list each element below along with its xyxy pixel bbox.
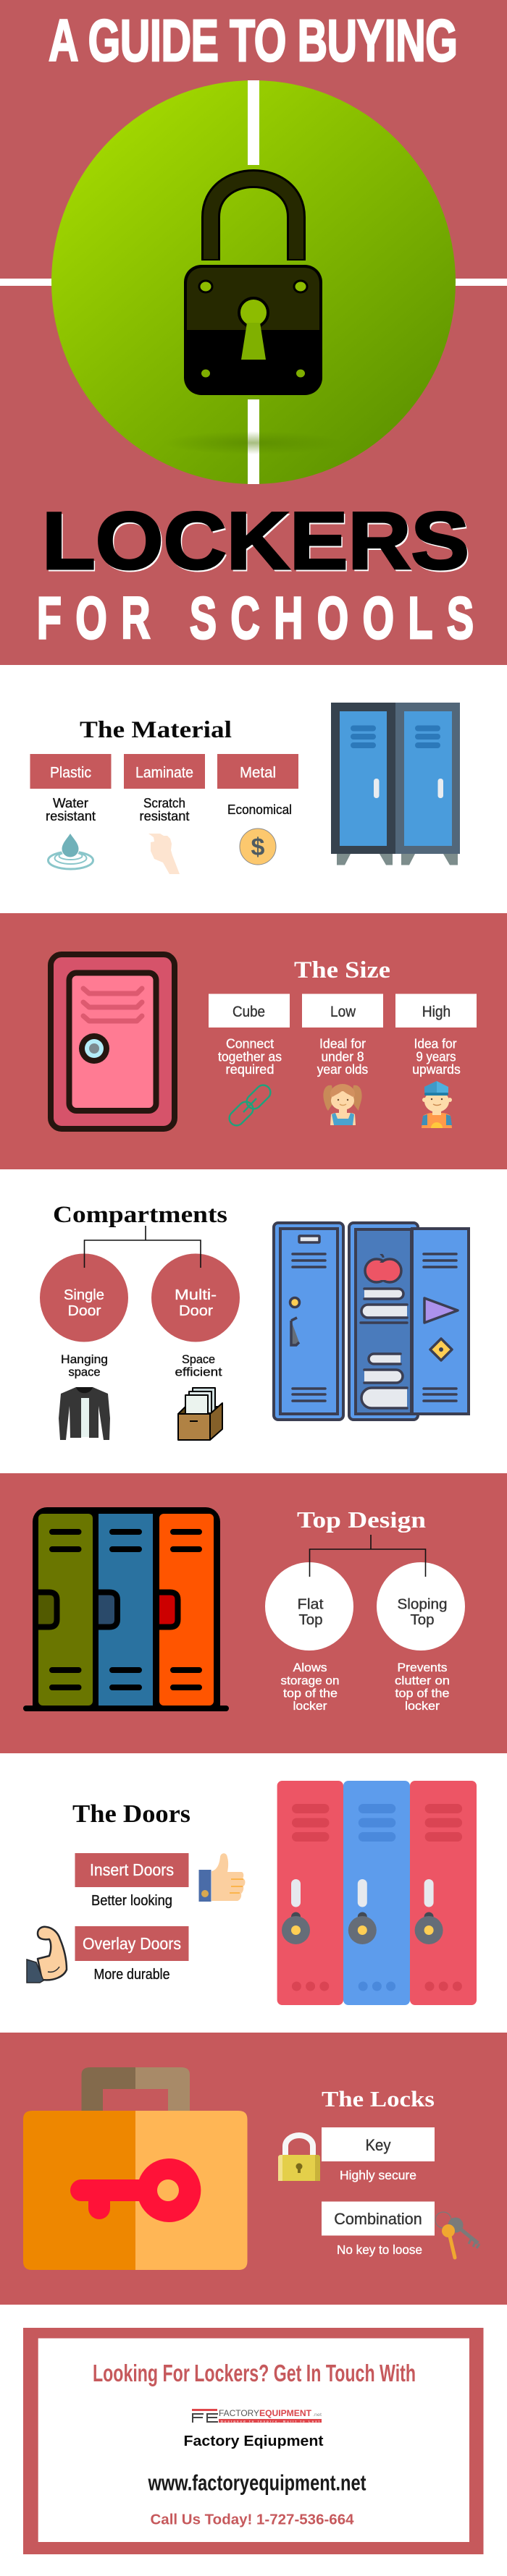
circle: single door: Door (68, 1303, 101, 1319)
text: economical: Economical (227, 802, 292, 817)
title: lockers: LOCKERS (43, 498, 471, 588)
text: connect together as required: together as (218, 1049, 282, 1064)
title: for schools: FOR SCHOOLS (37, 585, 474, 651)
text: space efficient: Space (182, 1353, 215, 1366)
circle: sloping top (377, 1562, 465, 1651)
decorative crosshair lines (0, 279, 507, 286)
text: no key to loose: No key to loose (337, 2242, 422, 2257)
box: high: High (422, 1004, 451, 1020)
icon: pennant (424, 1298, 458, 1323)
illustration: colored locker row (23, 1507, 229, 1711)
text: hanging space: space (68, 1366, 100, 1379)
text: scratch resistant: resistant (139, 808, 190, 823)
illustration: red and blue lockers (277, 1781, 477, 2005)
logo: factory equipment (192, 2408, 322, 2423)
panel: the size (0, 913, 507, 1169)
text: ideal for under 8 year olds: year olds (317, 1062, 368, 1077)
logo: factory equipment: Designed to Inspire. Built to Last (221, 2420, 320, 2423)
icon: diamond sticker (430, 1339, 452, 1360)
text: prevents clutter: Prevents (397, 1661, 448, 1674)
heading: the material: The Material (80, 717, 232, 743)
panel: hero (0, 0, 507, 665)
text: water resistant: Water (53, 795, 88, 810)
box: cube (209, 994, 290, 1028)
box: metal (217, 754, 298, 789)
text: prevents clutter: top of the (395, 1687, 449, 1700)
lock shadow (163, 431, 344, 454)
circle: multi-door (151, 1253, 240, 1342)
circle: single door (40, 1253, 128, 1342)
circle: single door: Single (64, 1287, 104, 1303)
text: allows storage: top of the (283, 1687, 338, 1700)
icon: gold padlock (278, 2135, 320, 2181)
logo: factory equipment: .net (313, 2413, 322, 2418)
circle: multi-door: Multi- (175, 1287, 217, 1303)
circle: sloping top: Top (410, 1612, 435, 1628)
box: insert doors (75, 1853, 188, 1887)
crosshair vertical bars (248, 80, 259, 484)
icon: file box (178, 1388, 222, 1440)
text: prevents clutter: locker (405, 1700, 440, 1713)
logo: factory equipment: EQUIPMENT (259, 2408, 312, 2418)
icon: dollar coin: $ (251, 834, 265, 861)
box: plastic (30, 754, 112, 789)
box: key: Key (365, 2136, 391, 2154)
text: ideal for under 8 year olds (317, 1036, 368, 1077)
text: idea for 9 years upwards: 9 years (416, 1049, 456, 1064)
text: connect together as required (218, 1036, 282, 1077)
text: idea for 9 years upwards: Idea for (414, 1036, 456, 1051)
circle: flat top (265, 1562, 353, 1651)
illustration: blue lockers with books (274, 1223, 469, 1420)
box: plastic: Plastic (50, 764, 91, 781)
box: overlay doors (75, 1926, 188, 1961)
text: space efficient (175, 1353, 222, 1379)
text: prevents clutter: clutter on (395, 1674, 450, 1687)
panel: the locks (0, 2033, 507, 2305)
icon: key ring (435, 2212, 479, 2258)
illustration: double locker (331, 703, 460, 865)
text: water resistant: resistant (46, 808, 96, 823)
connector: compartments tree (84, 1226, 201, 1268)
box: laminate (124, 754, 205, 789)
text: more durable: More durable (94, 1967, 169, 1983)
text: connect together as required: required (226, 1062, 274, 1077)
text: phone: Call Us Today! 1-727-536-664 (151, 2512, 354, 2528)
text: idea for 9 years upwards: upwards (412, 1062, 461, 1077)
circle: flat top: Top (298, 1612, 323, 1628)
text: ideal for under 8 year olds: under 8 (322, 1049, 364, 1064)
box: low (302, 994, 383, 1028)
text: website: www.factoryequipment.net (148, 2470, 366, 2495)
contact frame (23, 2328, 484, 2554)
icon: jacket (59, 1387, 110, 1440)
text: allows storage (281, 1661, 339, 1713)
text: scratch resistant: Scratch (143, 795, 185, 810)
box: key (322, 2127, 435, 2161)
box: laminate: Laminate (135, 764, 193, 781)
title: a guide to buying: A GUIDE TO BUYING (49, 7, 458, 73)
icon: boy with cap (422, 1081, 452, 1128)
icon: flexed arm (27, 1927, 67, 1983)
icon: red key (70, 2158, 201, 2222)
heading: the locks: The Locks (322, 2086, 435, 2111)
icon: water drop (48, 833, 93, 869)
text: factory eqiupment: Factory Eqiupment (184, 2433, 324, 2449)
text: allows storage: locker (293, 1700, 327, 1713)
text: hanging space (61, 1353, 108, 1379)
icon: chain link (226, 1082, 274, 1129)
heading: the doors: The Doors (72, 1800, 190, 1828)
text: scratch resistant (139, 795, 190, 823)
box: combination (322, 2201, 435, 2236)
icon: girl (323, 1084, 362, 1125)
icon: stacked books (361, 1289, 407, 1408)
text: connect together as required: Connect (226, 1036, 274, 1051)
circle: multi-door: Door (179, 1303, 213, 1319)
icon: dollar coin (240, 829, 276, 865)
box: overlay doors: Overlay Doors (83, 1934, 181, 1953)
text: allows storage: Alows (293, 1661, 327, 1674)
title: lockers: LOCKERS (42, 496, 469, 586)
text: idea for 9 years upwards (412, 1036, 461, 1077)
box: combination: Combination (334, 2210, 422, 2228)
text: water resistant (46, 795, 96, 823)
heading: the size: The Size (294, 957, 390, 983)
text: better looking: Better looking (91, 1893, 172, 1909)
circle: flat top: Flat (297, 1596, 324, 1612)
panel: the doors (0, 1753, 507, 2033)
box: insert doors: Insert Doors (90, 1860, 174, 1879)
panel: the material (0, 665, 507, 913)
illustration: briefcase with key (23, 2067, 248, 2270)
green circle (51, 80, 456, 484)
panel: contact (0, 2305, 507, 2576)
icon: thumbs up (198, 1853, 245, 1902)
logo: factory equipment: FACTORY (219, 2408, 259, 2418)
illustration: pink locker (51, 954, 175, 1129)
box: cube: Cube (232, 1004, 265, 1020)
box: low: Low (330, 1004, 356, 1020)
heading: compartments: Compartments (53, 1202, 227, 1228)
panel: top design (0, 1473, 507, 1753)
text: hanging space: Hanging (61, 1353, 108, 1366)
panel: compartments (0, 1169, 507, 1473)
heading: top design: Top Design (297, 1507, 426, 1533)
text: allows storage: storage on (281, 1674, 339, 1687)
icon: padlock (184, 179, 322, 395)
box: high (395, 994, 477, 1028)
icon: apple (365, 1254, 401, 1282)
text: highly secure: Highly secure (340, 2168, 416, 2182)
circle: sloping top: Sloping (397, 1596, 448, 1612)
icon: scratching hand (148, 834, 180, 874)
text: ideal for under 8 year olds: Ideal for (319, 1036, 366, 1051)
text: space efficient: efficient (175, 1366, 222, 1379)
box: metal: Metal (240, 764, 276, 781)
text: prevents clutter (395, 1661, 450, 1713)
connector: top design tree (310, 1535, 426, 1577)
